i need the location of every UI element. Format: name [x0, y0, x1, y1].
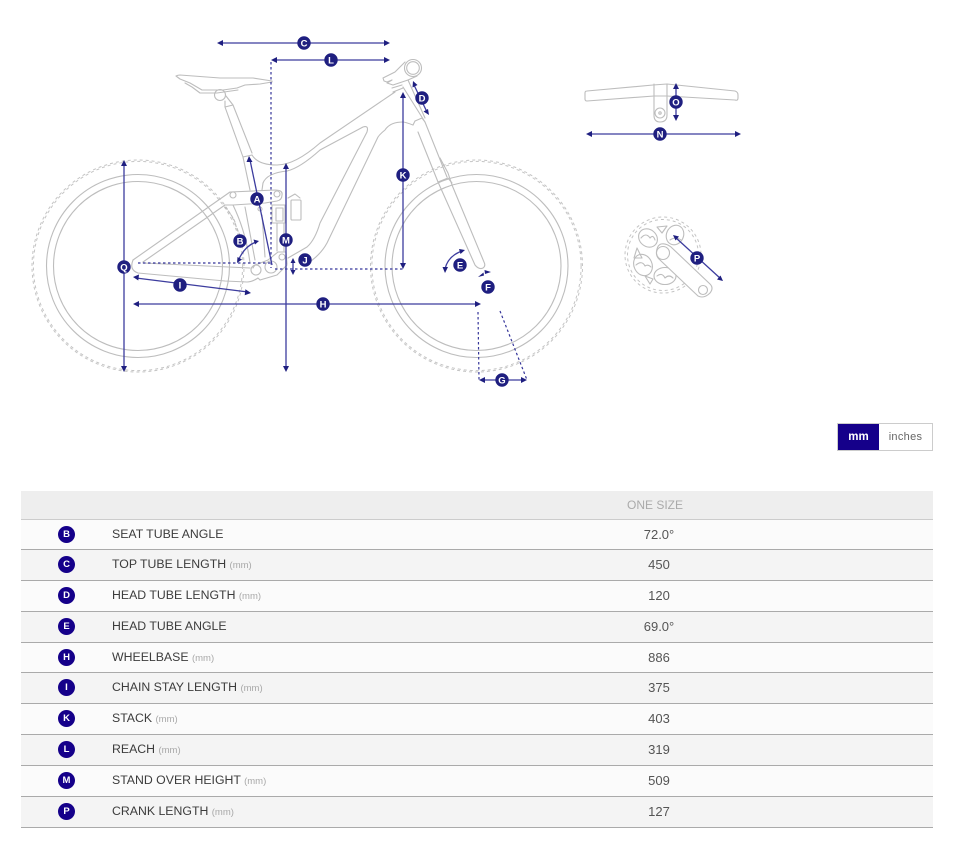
seatpost and saddle	[176, 75, 272, 190]
dimension B: B	[237, 236, 244, 248]
bike frame	[132, 92, 413, 282]
row: stack: STACK (mm)	[112, 711, 178, 725]
toggle: mm: mm	[848, 431, 869, 443]
row: head tube angle: HEAD TUBE ANGLE	[112, 619, 227, 633]
row: crank length: P	[63, 806, 70, 817]
dimension E	[442, 249, 467, 273]
dimension P: P	[694, 254, 701, 264]
fork	[418, 122, 485, 269]
dimension L	[271, 53, 390, 67]
unit toggle	[837, 423, 933, 451]
rear wheel	[32, 160, 244, 372]
row: wheelbase: WHEELBASE (mm)	[112, 650, 214, 664]
dimension P	[673, 235, 723, 281]
dimension L: L	[328, 56, 334, 66]
row: reach: L	[64, 744, 69, 755]
dimension A	[246, 156, 272, 265]
row: head tube length	[21, 581, 933, 612]
dimension Q: Q	[120, 262, 128, 274]
row: head tube length: 120	[648, 588, 670, 603]
row: head tube angle: 69.0°	[644, 619, 674, 634]
row: top tube length: TOP TUBE LENGTH (mm)	[112, 557, 252, 571]
row: crank length: CRANK LENGTH (mm)	[112, 804, 234, 818]
row: seat tube angle: SEAT TUBE ANGLE	[112, 527, 223, 541]
toggle: mm	[838, 424, 879, 450]
dimension N	[586, 127, 741, 141]
dimension E: E	[457, 260, 463, 272]
row: stand over height: STAND OVER HEIGHT (mm)	[112, 773, 266, 787]
head tube and stem	[383, 60, 425, 125]
row: head tube length: HEAD TUBE LENGTH (mm)	[112, 588, 261, 602]
row: wheelbase: H	[63, 652, 70, 663]
row: head tube angle	[21, 612, 933, 643]
dimension D: D	[419, 94, 426, 104]
dimension K: K	[400, 170, 407, 182]
row: stand over height: M	[63, 775, 70, 786]
dimension Q	[117, 160, 131, 372]
handlebar	[585, 84, 738, 122]
dimension M	[279, 163, 293, 372]
dimension M: M	[282, 236, 290, 246]
row: seat tube angle: 72.0°	[644, 527, 674, 542]
row: chain stay length: CHAIN STAY LENGTH (mm)	[112, 680, 263, 694]
dimension K	[396, 92, 410, 269]
row: stack: 403	[648, 711, 670, 726]
dimension G: G	[498, 376, 506, 386]
row: stack: K	[63, 713, 70, 724]
toggle: inches: inches	[889, 431, 922, 443]
dimension H: H	[320, 300, 327, 310]
row: head tube length: D	[63, 590, 70, 601]
row: top tube length: C	[63, 559, 70, 570]
rear shock	[272, 194, 301, 251]
geometry table	[21, 491, 933, 828]
row: stack	[21, 704, 933, 735]
dimension N: N	[657, 130, 664, 140]
row: stand over height: 509	[648, 773, 670, 788]
row: reach	[21, 735, 933, 766]
row: chain stay length: I	[65, 682, 68, 693]
front wheel	[370, 160, 582, 372]
row: head tube angle: E	[63, 621, 70, 632]
dimension F: F	[485, 282, 491, 294]
row: seat tube angle	[21, 520, 933, 550]
dimension J	[290, 253, 312, 275]
row: top tube length	[21, 550, 933, 581]
row: reach: REACH (mm)	[112, 742, 181, 756]
row: seat tube angle: B	[63, 529, 70, 540]
table header	[21, 491, 933, 520]
dimension C: C	[301, 38, 308, 50]
dimension I: I	[179, 280, 181, 292]
dimension O	[669, 83, 683, 121]
dimension H	[133, 297, 481, 311]
dimension O: O	[672, 98, 680, 108]
dimension A: A	[254, 194, 261, 206]
bike geometry diagram	[32, 36, 741, 387]
row: wheelbase	[21, 643, 933, 673]
row: crank length: 127	[648, 804, 670, 819]
dimension D	[412, 81, 429, 115]
dimension I	[133, 274, 251, 295]
crankset	[625, 217, 712, 297]
row: crank length	[21, 797, 933, 828]
table header: ONE SIZE	[627, 498, 683, 512]
row: reach: 319	[648, 742, 670, 757]
row: wheelbase: 886	[648, 650, 670, 665]
dotted reference lines	[138, 62, 527, 380]
row: chain stay length: 375	[648, 680, 670, 695]
dimension F	[478, 270, 495, 294]
dimension G	[479, 373, 527, 387]
dimension B	[233, 234, 259, 263]
row: top tube length: 450	[648, 557, 670, 572]
dimension J: J	[302, 256, 308, 266]
row: chain stay length	[21, 673, 933, 704]
dimension C	[217, 36, 390, 50]
row: stand over height	[21, 766, 933, 797]
